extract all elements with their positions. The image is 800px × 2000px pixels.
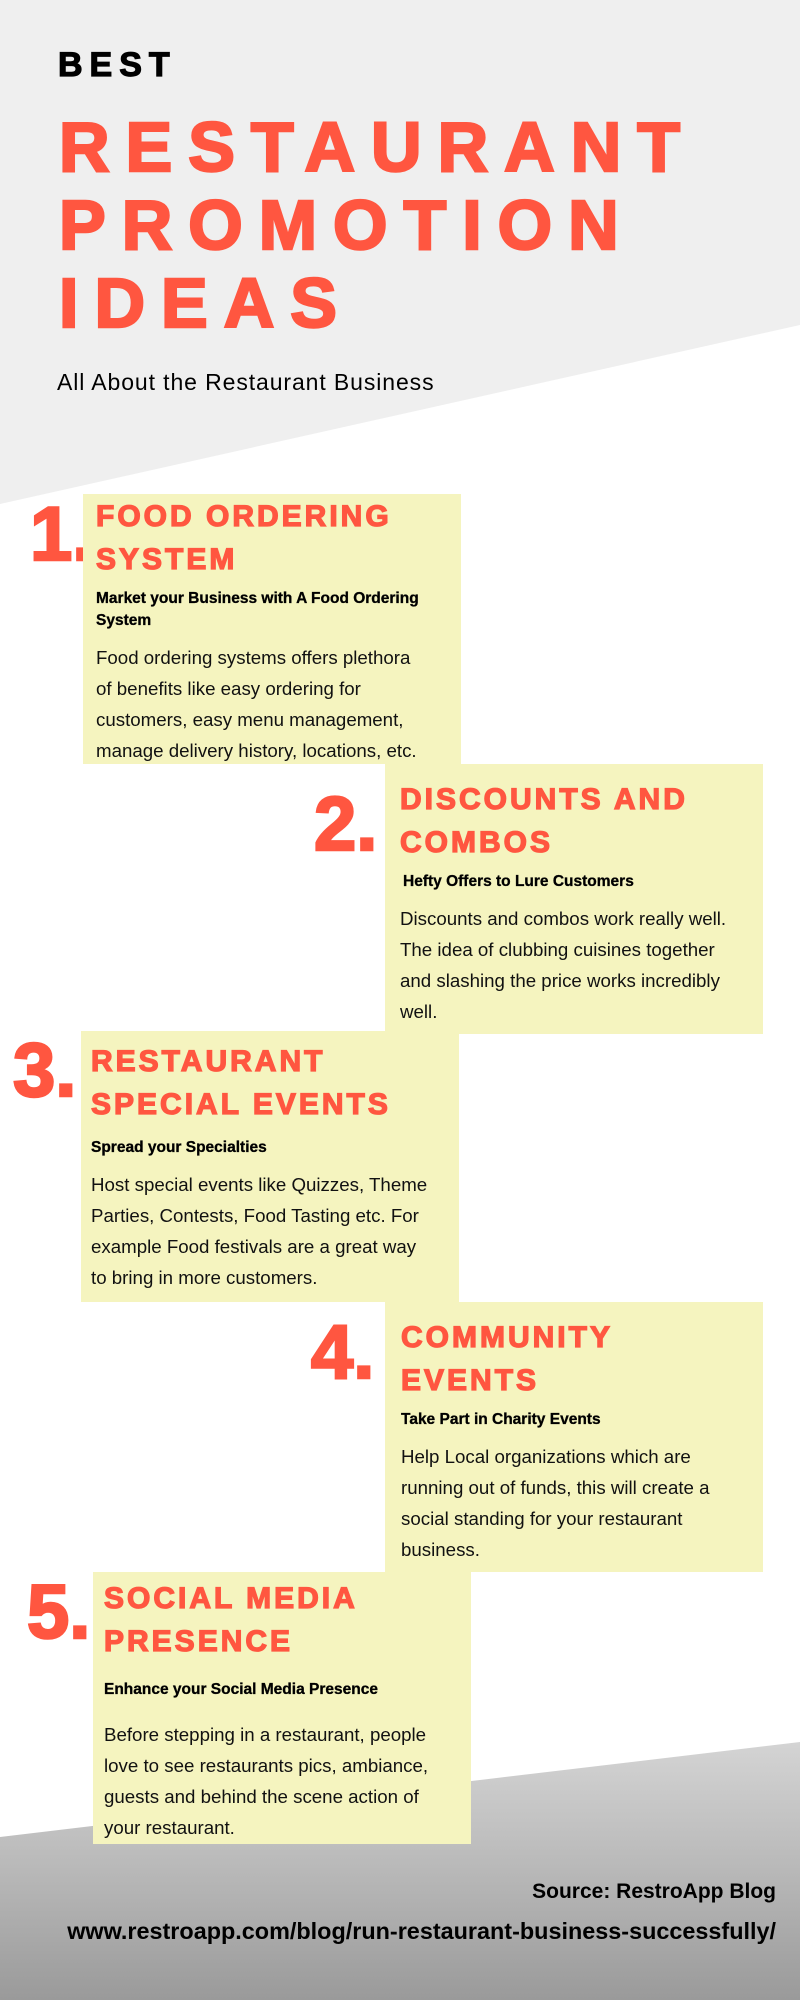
- title: IDEAS: [59, 264, 353, 342]
- panel 2: and slashing the price works incredibly: [400, 970, 720, 991]
- panel 2: [385, 764, 763, 1034]
- panel 1: [83, 494, 461, 764]
- panel 3: Spread your Specialties: [91, 1139, 267, 1156]
- panel 5: [93, 1572, 471, 1844]
- number 1: 1.: [30, 492, 93, 577]
- panel 3: Parties, Contests, Food Tasting etc. For: [91, 1205, 419, 1226]
- panel 5: Before stepping in a restaurant, people: [104, 1724, 426, 1745]
- panel 2: Hefty Offers to Lure Customers: [403, 873, 634, 890]
- title: [59, 108, 696, 342]
- number 5: 5.: [27, 1570, 90, 1655]
- title: best: BEST: [58, 46, 177, 84]
- source: Source: RestroApp Blog: [532, 1880, 776, 1903]
- panel 1: of benefits like easy ordering for: [96, 678, 361, 699]
- number 2: 2.: [314, 782, 377, 867]
- source url: www.restroapp.com/blog/run-restaurant-business-successfully/: [67, 1918, 776, 1944]
- panel 4: Help Local organizations which are: [401, 1446, 691, 1467]
- panel 2: Discounts and combos work really well.: [400, 908, 726, 929]
- title: RESTAURANT: [59, 108, 696, 186]
- panel 3: RESTAURANT SPECIAL EVENTS: [91, 1045, 391, 1121]
- panel 4: COMMUNITY EVENTS: [401, 1321, 612, 1397]
- number 3: 3.: [13, 1028, 76, 1113]
- panel 2: well.: [400, 1001, 437, 1022]
- panel 3: to bring in more customers.: [91, 1267, 317, 1288]
- panel 5: your restaurant.: [104, 1817, 235, 1838]
- subtitle: All About the Restaurant Business: [57, 369, 434, 395]
- panel 2: DISCOUNTS AND COMBOS: [400, 783, 688, 859]
- panel 3: Host special events like Quizzes, Theme: [91, 1174, 427, 1195]
- panel 1: Food ordering systems offers plethora: [96, 647, 410, 668]
- panel 5: guests and behind the scene action of: [104, 1786, 419, 1807]
- panel 2: The idea of clubbing cuisines together: [400, 939, 715, 960]
- panel 4: running out of funds, this will create a: [401, 1477, 710, 1498]
- panel 4: Take Part in Charity Events: [401, 1411, 601, 1428]
- panel 4: business.: [401, 1539, 480, 1560]
- panel 3: example Food festivals are a great way: [91, 1236, 416, 1257]
- panel 3: [81, 1031, 459, 1302]
- panel 5: love to see restaurants pics, ambiance,: [104, 1755, 428, 1776]
- number 4: 4.: [311, 1310, 374, 1395]
- panel 4: [385, 1302, 763, 1572]
- panel 5: Enhance your Social Media Presence: [104, 1681, 378, 1698]
- title: PROMOTION: [59, 186, 635, 264]
- panel 4: social standing for your restaurant: [401, 1508, 682, 1529]
- panel 1: FOOD ORDERING SYSTEM: [96, 500, 392, 576]
- panel 1: customers, easy menu management,: [96, 709, 403, 730]
- panel 1: manage delivery history, locations, etc.: [96, 740, 417, 761]
- panel 1: Market your Business with A Food Ordering System: [96, 590, 419, 629]
- panel 5: SOCIAL MEDIA PRESENCE: [104, 1582, 357, 1658]
